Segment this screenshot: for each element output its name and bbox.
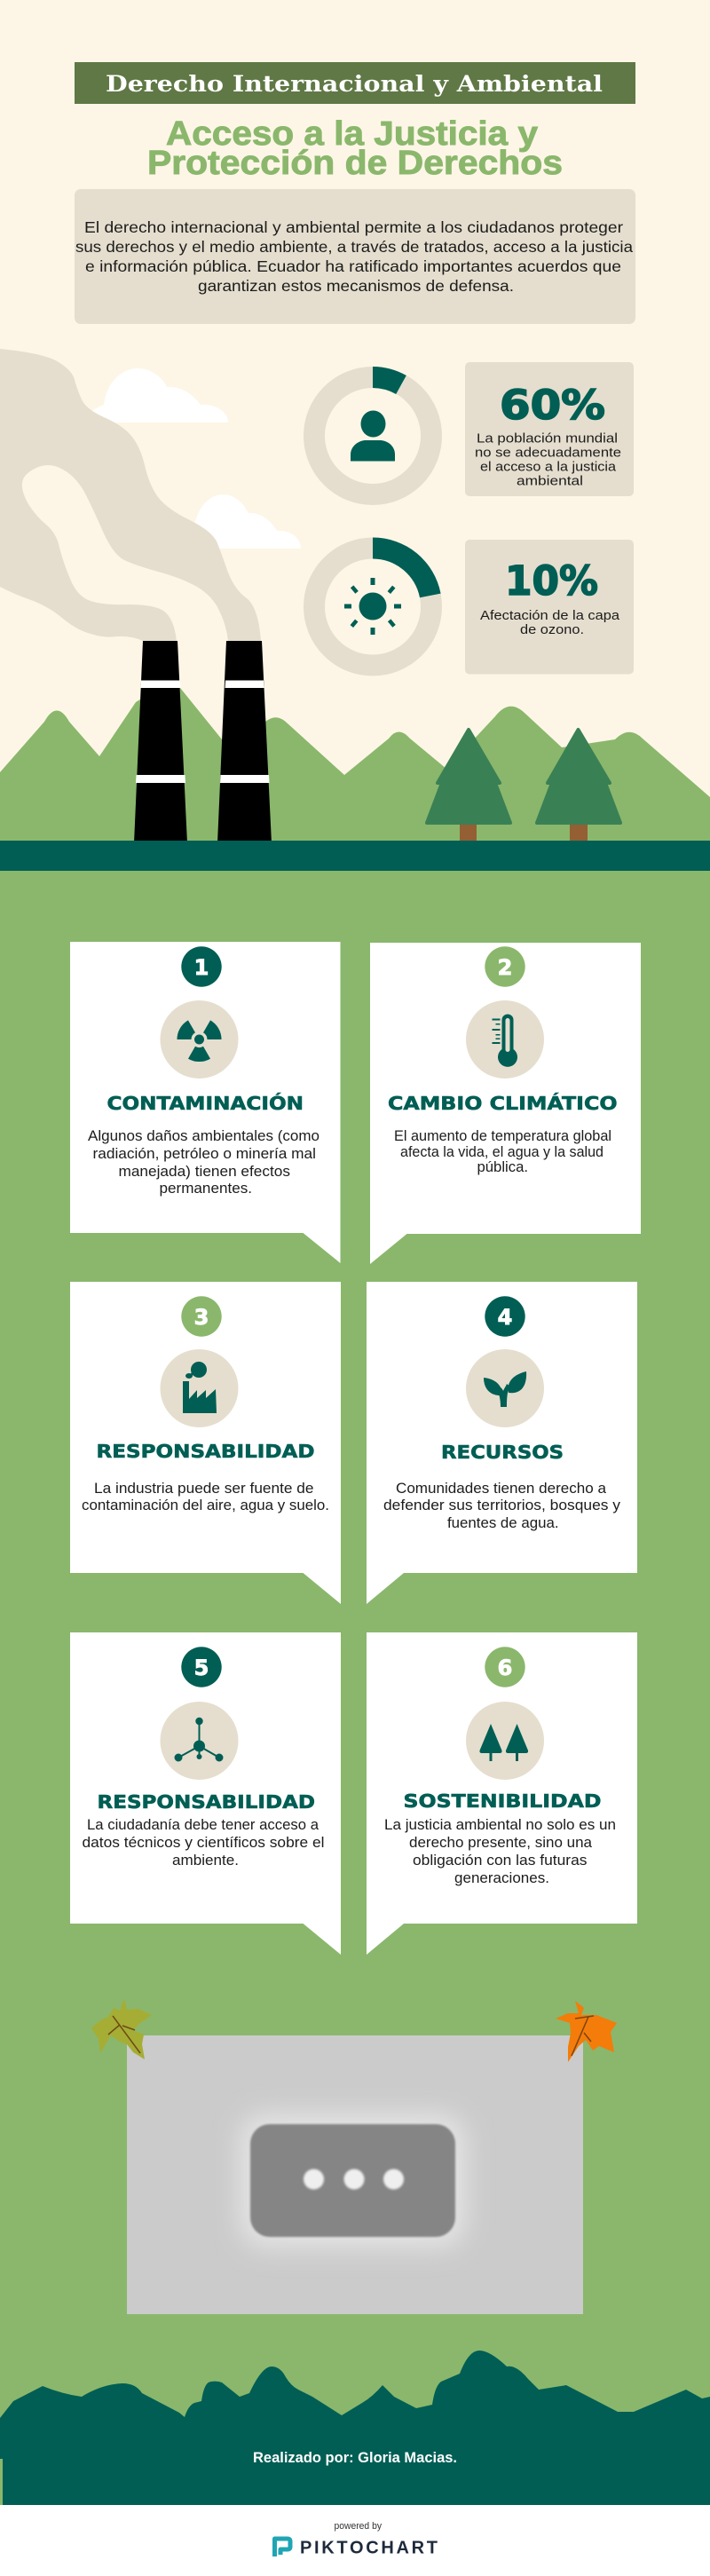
icon: person	[351, 410, 395, 462]
donut chart: 60%	[314, 367, 431, 494]
body text: defender sus territorios, bosques y	[383, 1497, 621, 1513]
number badge 4	[485, 1296, 525, 1337]
heading: CAMBIO CLIMÁTICO	[388, 1093, 618, 1114]
donut chart: 10%	[314, 538, 441, 666]
icon: orange leaf	[556, 2001, 617, 2062]
intro text panel: e información pública. Ecuador ha ratificado importantes acuerdos que	[85, 257, 621, 275]
body text: derecho presente, sino una	[409, 1835, 593, 1851]
white footer bar	[0, 2505, 710, 2576]
cream header background	[0, 0, 710, 843]
body text: La industria puede ser fuente de	[94, 1481, 314, 1497]
body text: permanentes.	[160, 1181, 252, 1197]
subtitle: Protección de Derechos	[147, 145, 563, 182]
number badge 2	[485, 946, 525, 987]
icon: trees	[466, 1702, 544, 1780]
heading: SOSTENIBILIDAD	[403, 1790, 602, 1812]
body text: radiación, petróleo o minería mal	[92, 1146, 316, 1162]
icon: sun	[344, 578, 401, 635]
body text: Comunidades tienen derecho a	[396, 1481, 607, 1497]
stat card: 60%	[465, 362, 634, 496]
icon: factory	[160, 1349, 238, 1427]
body text	[82, 1817, 325, 1869]
subtitle: Acceso a la Justicia y	[166, 115, 538, 153]
body text: obligación con las futuras	[413, 1853, 588, 1869]
stat card: 10%: 10%	[505, 557, 598, 604]
heading: RESPONSABILIDAD	[98, 1791, 315, 1813]
body text: fuentes de agua.	[447, 1515, 559, 1531]
stat card: 10%: Afectación de la capa	[480, 608, 620, 623]
stat card: 60%: no se adecuadamente	[475, 446, 621, 460]
panel: 4 recursos	[367, 1282, 637, 1604]
icon: radiation	[160, 1000, 238, 1079]
icon: network	[160, 1702, 238, 1780]
body text	[394, 1128, 611, 1175]
body text: Algunos daños ambientales (como	[88, 1128, 320, 1144]
number badge 1	[181, 946, 222, 987]
stat card: 60%: el acceso a la justicia	[480, 460, 617, 474]
panel: 1 contaminación	[70, 942, 341, 1263]
heading: RESPONSABILIDAD	[96, 1441, 314, 1462]
chimney left	[134, 641, 187, 843]
number badge 3: 3	[194, 1305, 209, 1330]
title banner	[75, 62, 635, 104]
number badge 1: 1	[194, 955, 209, 980]
body text: datos técnicos y científicos sobre el	[82, 1835, 325, 1851]
icon: thermometer	[466, 1000, 544, 1079]
author credit: Realizado por: Gloria Macias.	[253, 2449, 457, 2466]
intro text panel	[75, 189, 635, 324]
chimney right	[217, 641, 272, 843]
mountains	[0, 679, 710, 843]
stat card: 10%	[465, 540, 634, 675]
number badge 6: 6	[498, 1655, 512, 1680]
subtitle	[147, 115, 563, 182]
stat card: 60%: ambiental	[517, 474, 583, 488]
body text: generaciones.	[454, 1870, 549, 1886]
number badge 5	[181, 1647, 222, 1687]
icon: piktochart logo	[275, 2539, 290, 2556]
body text: afecta la vida, el agua y la salud	[400, 1144, 604, 1160]
number badge 5: 5	[194, 1655, 209, 1680]
heading: RECURSOS	[441, 1442, 564, 1463]
green lower background	[0, 871, 710, 2505]
body text	[383, 1481, 621, 1531]
body text: contaminación del aire, agua y suelo.	[82, 1497, 329, 1513]
number badge 3	[181, 1296, 222, 1337]
ground band	[0, 841, 710, 871]
stat card: 60%: 60%	[500, 382, 605, 429]
video placeholder	[127, 2035, 583, 2314]
body text: pública.	[477, 1159, 528, 1175]
body text	[384, 1817, 616, 1886]
body text: ambiente.	[172, 1853, 239, 1869]
stat card: 60%: La población mundial	[477, 431, 618, 446]
dark mountain footer	[0, 2351, 710, 2505]
heading: CONTAMINACIÓN	[106, 1093, 304, 1114]
body text: La ciudadanía debe tener acceso a	[87, 1817, 320, 1833]
panel: 2 cambio climático	[370, 943, 641, 1264]
panel: 5 responsabilidad	[70, 1632, 341, 1955]
clouds	[86, 368, 301, 549]
panel: 6 sostenibilidad	[367, 1632, 637, 1955]
intro text panel: garantizan estos mecanismos de defensa.	[198, 277, 514, 295]
smoke plume	[0, 349, 261, 641]
panel: 3 responsabilidad	[70, 1282, 341, 1604]
icon: sprout	[466, 1349, 544, 1427]
body text	[88, 1128, 320, 1197]
piktochart wordmark: PIKTOCHART	[300, 2539, 438, 2558]
intro text panel: El derecho internacional y ambiental permite a los ciudadanos proteger	[84, 218, 623, 236]
stat card: 10%: de ozono.	[520, 622, 584, 637]
icon: olive leaf	[91, 1998, 152, 2059]
title banner: Derecho Internacional y Ambiental	[106, 71, 603, 97]
body text	[82, 1481, 329, 1513]
number badge 2: 2	[498, 955, 512, 980]
number badge 6	[485, 1647, 525, 1687]
tree left	[427, 730, 510, 842]
tree right	[537, 730, 620, 842]
body text: manejada) tienen efectos	[119, 1164, 290, 1180]
body text: La justicia ambiental no solo es un	[384, 1817, 616, 1833]
powered by: powered by	[334, 2521, 382, 2532]
body text: El aumento de temperatura global	[394, 1128, 611, 1144]
intro text panel: sus derechos y el medio ambiente, a través de tratados, acceso a la justicia	[75, 238, 633, 256]
number badge 4: 4	[498, 1305, 512, 1330]
